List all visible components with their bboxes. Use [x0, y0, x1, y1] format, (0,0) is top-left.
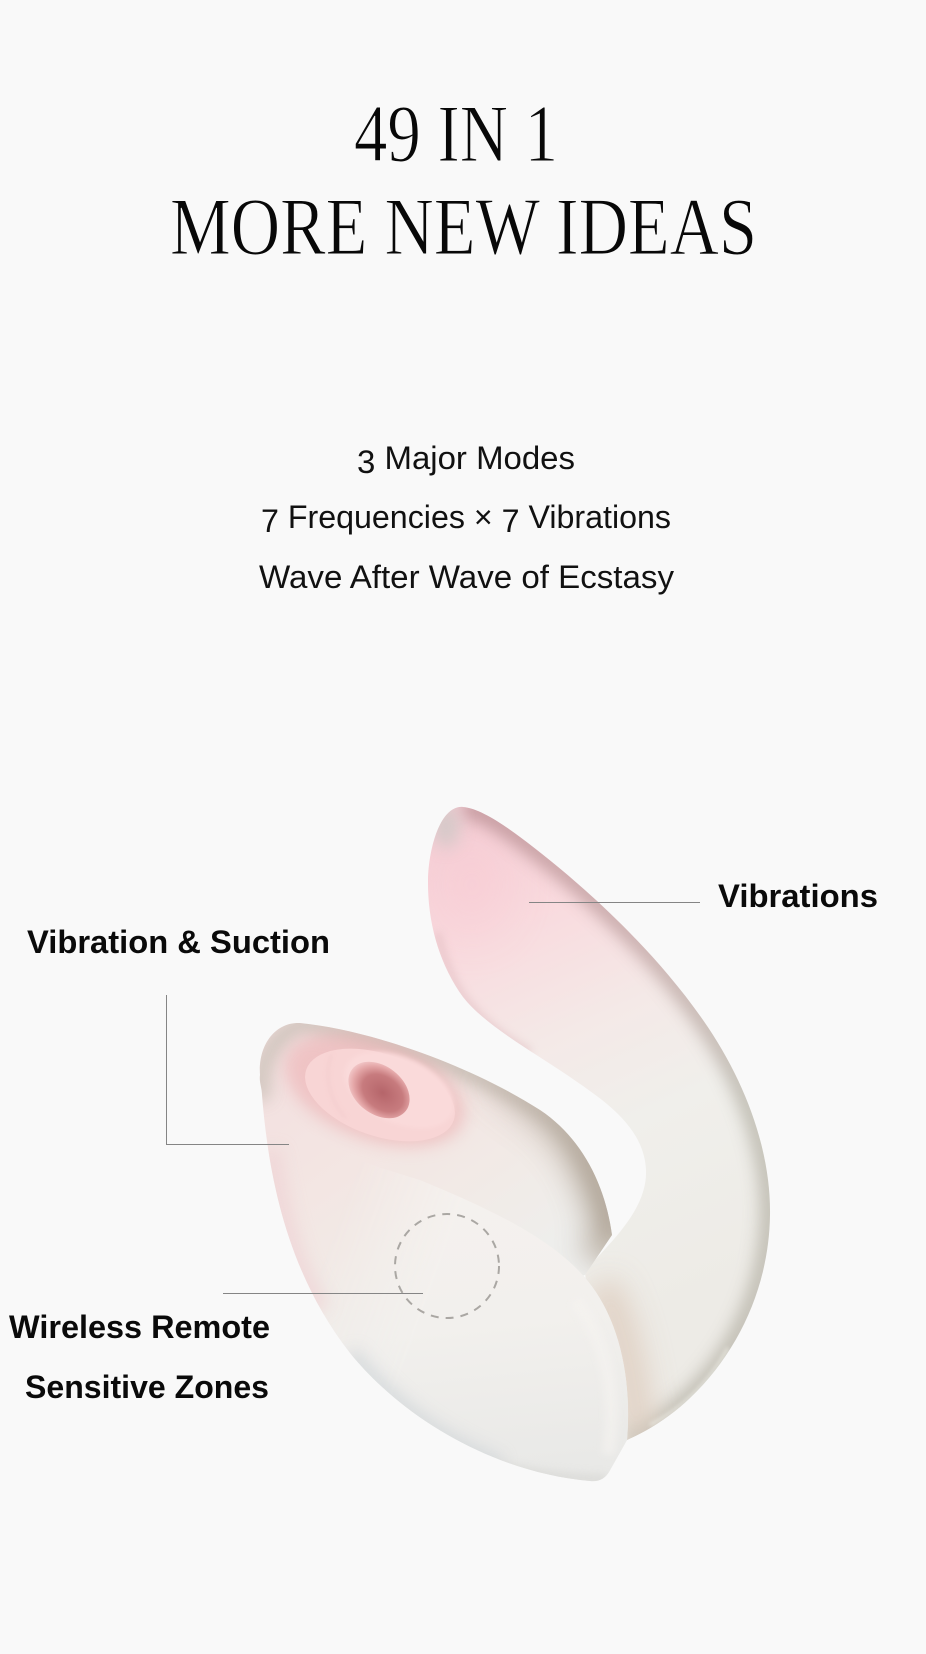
feature description text: Major Modes [375, 440, 575, 476]
title: MORE NEW IDEAS [170, 181, 757, 272]
dashed circle: sensitive zone [395, 1214, 499, 1318]
product: suction opening [293, 1031, 467, 1159]
label: vibrations: Vibrations [718, 878, 878, 914]
leader line: vibration and suction [166, 995, 289, 1144]
product: front flap [270, 1155, 608, 1482]
title [170, 88, 757, 272]
feature description text [259, 440, 674, 595]
product: suction opening halo [281, 1032, 470, 1152]
label: vibration and suction: Vibration & Suction [27, 924, 330, 960]
feature description text: 7 [502, 503, 520, 539]
label: sensitive zones: Sensitive Zones [25, 1369, 269, 1405]
feature description text: Frequencies × [279, 499, 502, 535]
leader line: wireless remote [223, 1292, 423, 1294]
feature description text: 7 [261, 503, 279, 539]
product: body [260, 1023, 628, 1437]
product: curved rear arm [420, 800, 780, 1450]
leader line: vibrations [529, 902, 700, 904]
feature description text: Vibrations [520, 499, 671, 535]
feature description text: 3 [357, 444, 375, 480]
product illustration [250, 800, 780, 1490]
feature description text: Wave After Wave of Ecstasy [259, 559, 674, 595]
label: wireless remote: Wireless Remote [9, 1309, 270, 1345]
title: 49 IN 1 [354, 88, 558, 179]
